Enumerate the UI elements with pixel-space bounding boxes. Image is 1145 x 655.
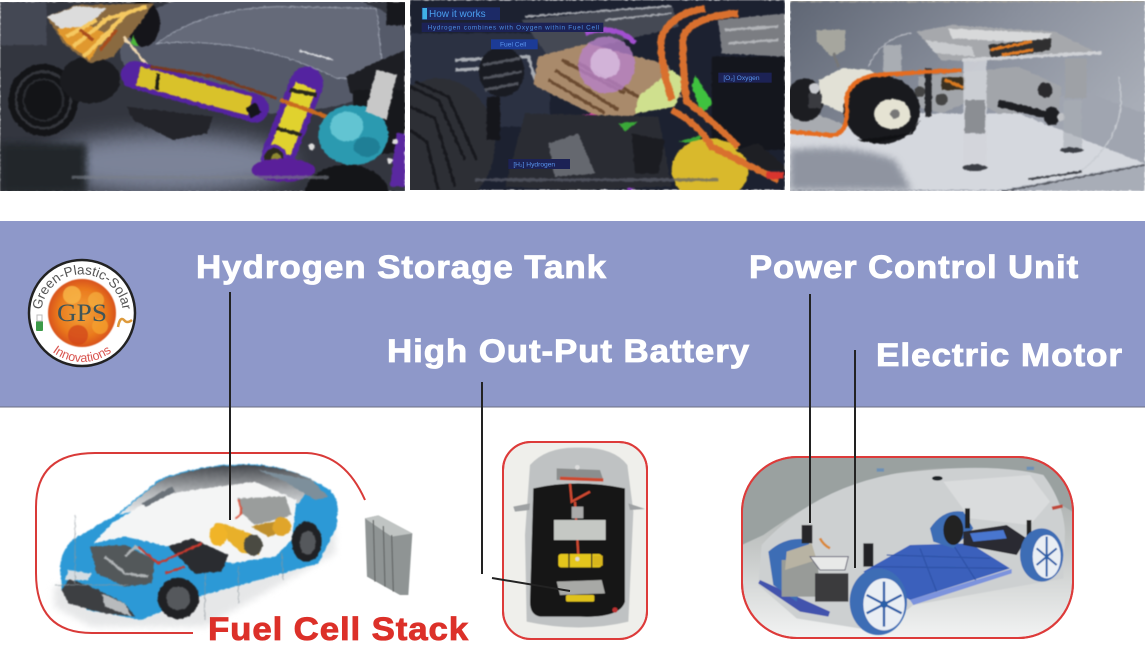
photo: hydrogen tanks chassis — [0, 2, 405, 191]
leader line: battery — [482, 382, 570, 591]
top view car — [503, 442, 647, 639]
label: fuel cell stack: Fuel Cell Stack — [208, 611, 469, 647]
logo ring text top: Green-Plastic-Solar — [33, 265, 130, 309]
photo: fuel cell display chassis — [787, 0, 1145, 192]
label: hydrogen storage tank: Hydrogen Storage Tank — [196, 249, 607, 285]
red outline — [36, 453, 365, 633]
label: high output battery: High Out-Put Battery — [387, 333, 750, 369]
icon: plastic swirl — [118, 319, 132, 327]
sun emblem — [48, 279, 116, 347]
fuel cell stack module — [365, 515, 412, 595]
photo captions: [O₂] Oxygen — [723, 75, 760, 82]
logo wordmark: GPS — [57, 300, 107, 327]
icon: green battery — [36, 315, 43, 331]
logo ring text bottom: Innovations — [53, 346, 111, 362]
label: power control unit: Power Control Unit — [749, 249, 1079, 285]
label: electric motor: Electric Motor — [876, 337, 1123, 373]
photo captions: [H₂] Hydrogen — [513, 162, 555, 169]
photo captions: Fuel Cell — [500, 42, 527, 49]
leader line: hydrogen tank — [229, 292, 231, 520]
photo captions: Hydrogen combines with Oxygen within Fuel Cell — [428, 24, 599, 31]
photo captions — [422, 7, 772, 169]
fuel cell car — [36, 453, 412, 633]
photo: how it works fuel cell — [410, 0, 785, 190]
photo captions: How it works — [429, 9, 486, 20]
platform car — [742, 456, 1073, 638]
leader line: electric motor — [854, 350, 856, 568]
header band — [0, 221, 1145, 407]
logo: GPS Innovations — [28, 258, 136, 368]
leader line: power control unit — [809, 294, 811, 523]
